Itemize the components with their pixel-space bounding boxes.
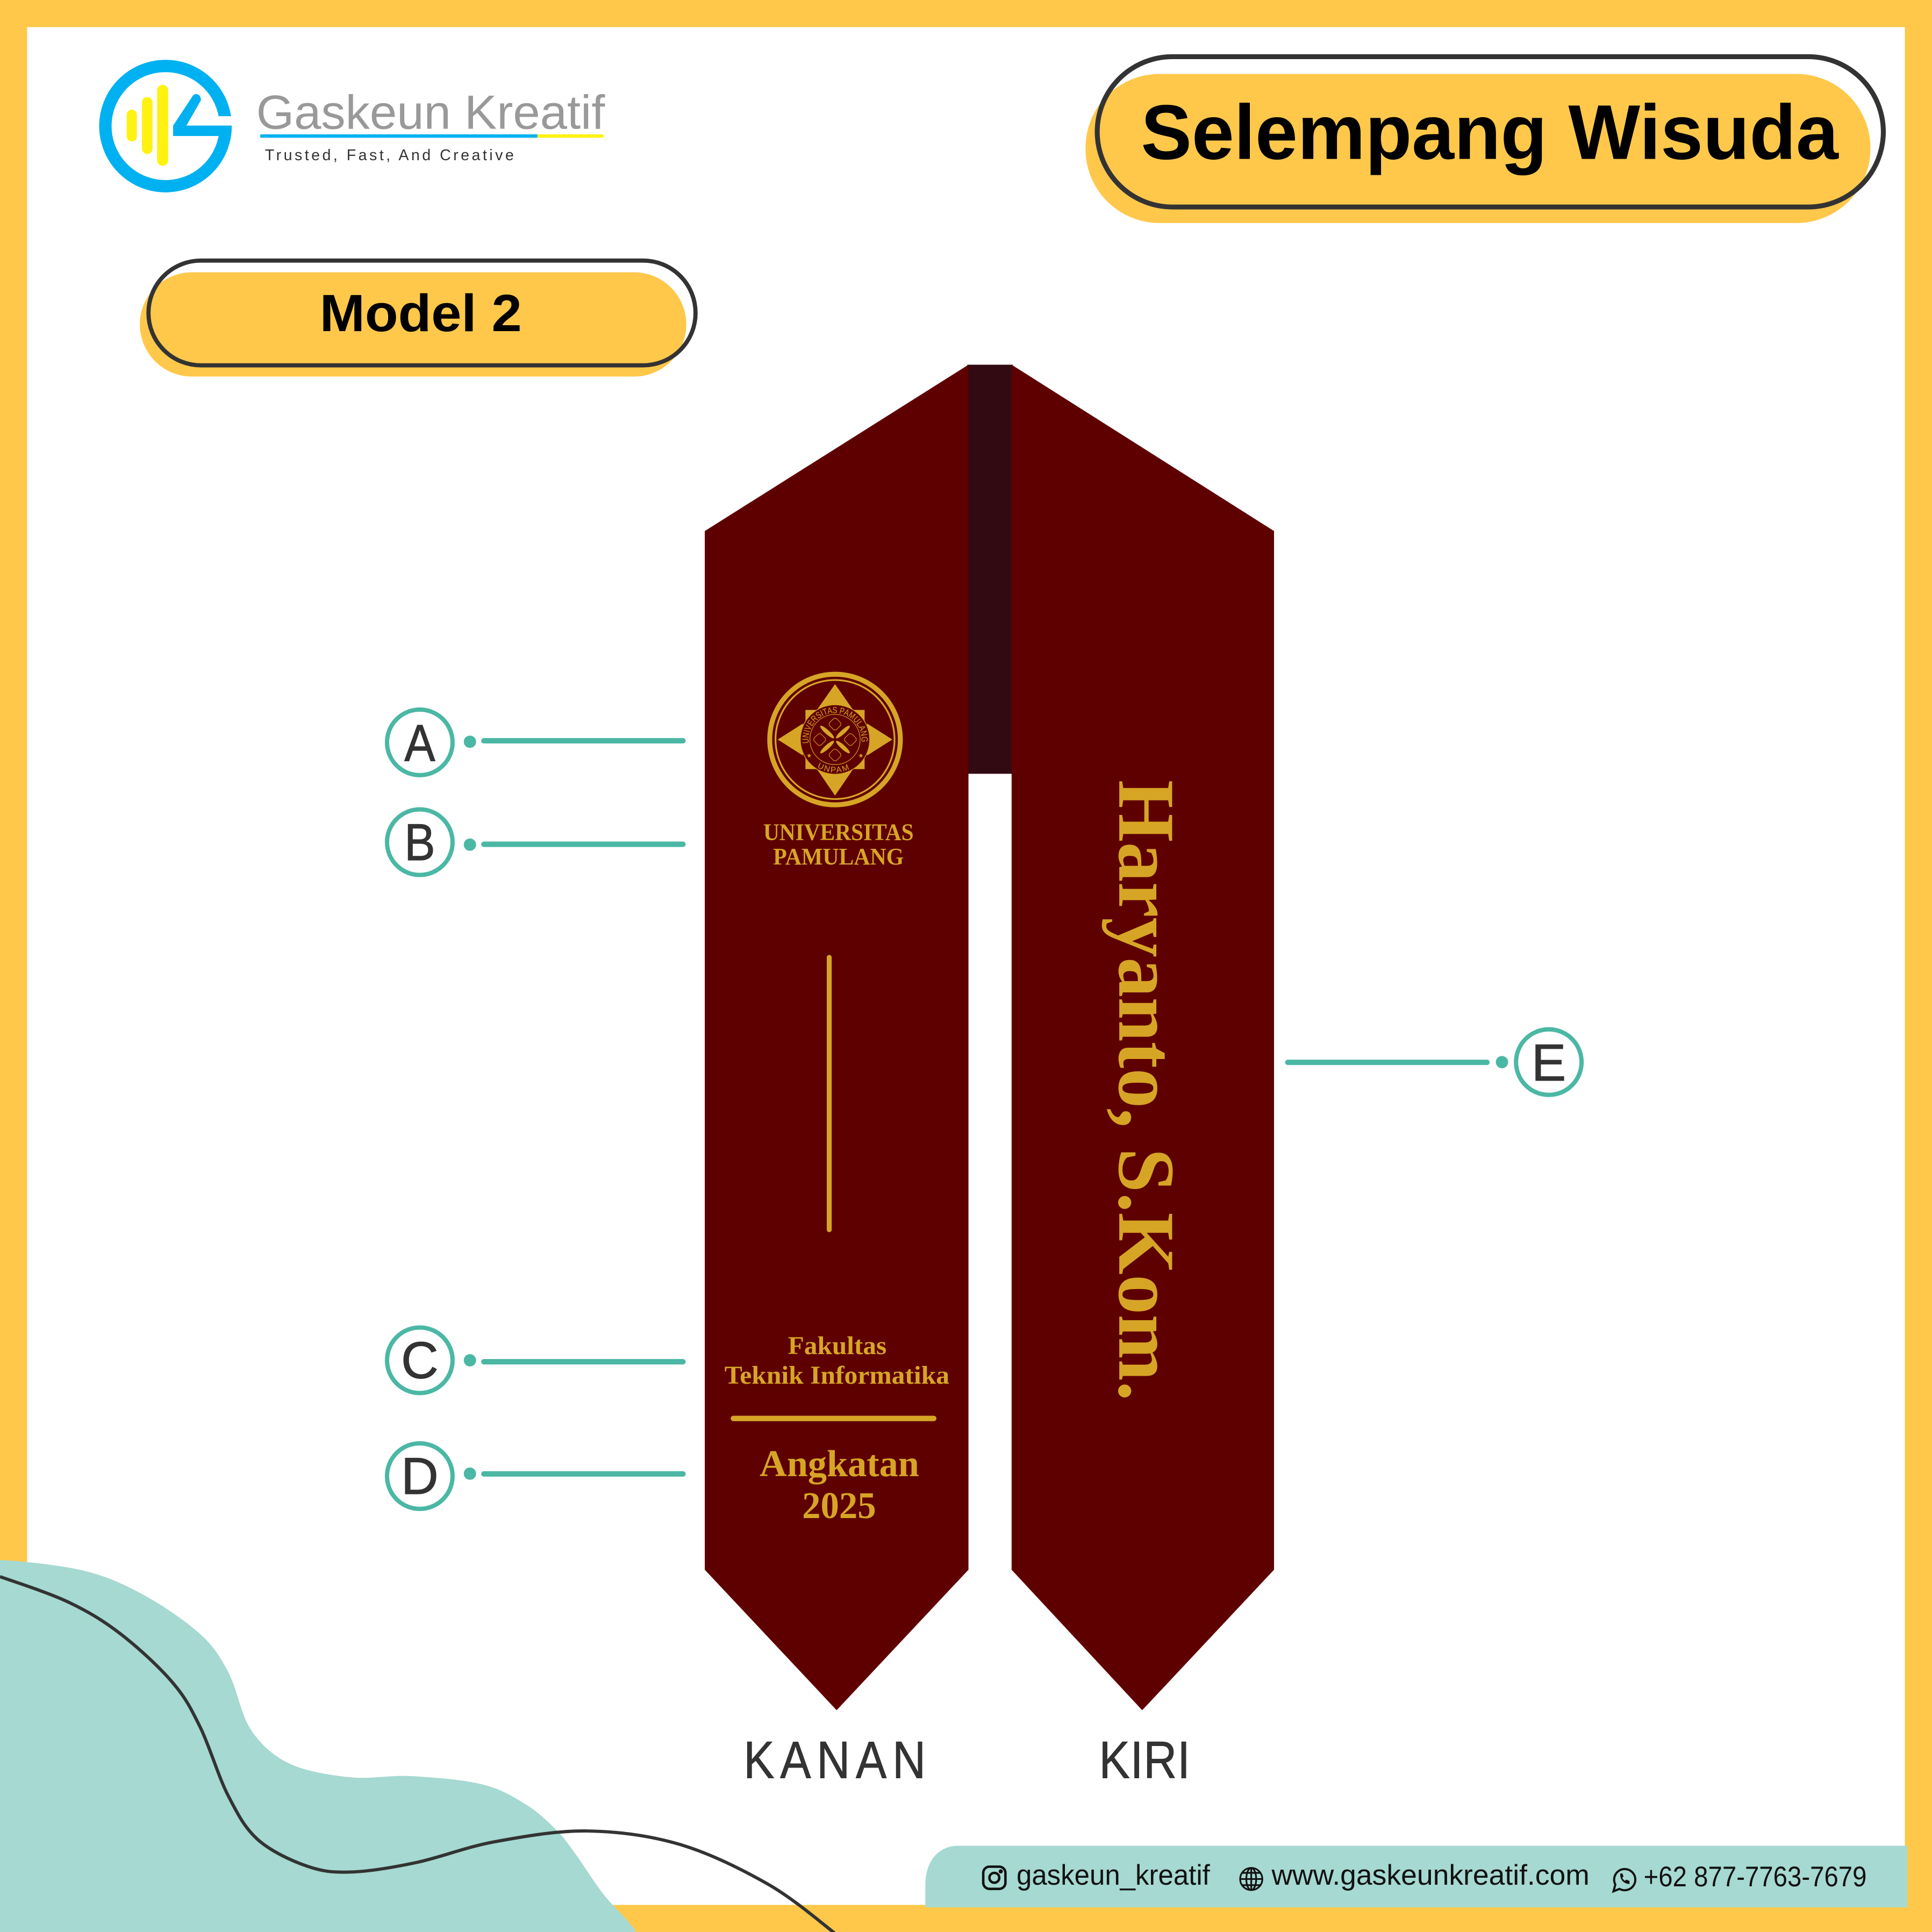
- logo underline blue: [260, 134, 539, 138]
- callout A: [387, 710, 686, 775]
- callout C: [387, 1327, 686, 1393]
- label: kanan: KANAN: [743, 1731, 926, 1790]
- text: angkatan: Angkatan: [760, 1443, 919, 1485]
- emblem: UNIVERSITAS PAMULANG: [802, 707, 868, 743]
- footer text: phone: +62 877-7763-7679: [1644, 1861, 1867, 1893]
- heading: model 2: Model 2: [320, 284, 522, 342]
- stole: kanan: [686, 364, 969, 1711]
- logo mark: bars: [127, 85, 168, 166]
- callout D: [387, 1443, 686, 1509]
- text: universitas: UNIVERSITAS: [763, 819, 914, 845]
- logo tagline: Trusted, Fast, And Creative: [265, 147, 514, 164]
- logo mark: ring: [99, 60, 232, 192]
- icon: globe: [1240, 1868, 1262, 1890]
- title: Selempang Wisuda: [1141, 89, 1839, 176]
- emblem: UNPAM: [818, 762, 849, 773]
- text: teknik informatika: Teknik Informatika: [725, 1361, 949, 1390]
- callout C: C: [401, 1332, 439, 1390]
- neck band: [967, 364, 1013, 774]
- heading: model 2: [140, 261, 696, 376]
- logo: [99, 60, 605, 192]
- callout B: [387, 810, 686, 875]
- decorative curve: [0, 1577, 838, 1932]
- emblem: ★: [858, 752, 864, 760]
- callout A: A: [404, 714, 435, 772]
- text: fakultas: Fakultas: [788, 1332, 886, 1360]
- logo wordmark: Gaskeun Kreatif: [256, 85, 605, 139]
- footer text: website: www.gaskeunkreatif.com: [1271, 1859, 1590, 1891]
- blob: bottom-left teal shape: [0, 1560, 636, 1932]
- text: pamulang: PAMULANG: [773, 843, 904, 870]
- emblem: ★: [806, 752, 812, 760]
- icon: instagram: [983, 1867, 1005, 1889]
- callout B: B: [404, 814, 435, 871]
- stole: kiri: [1012, 364, 1274, 1710]
- callout E: E: [1532, 1034, 1566, 1092]
- name: Haryanto, S.Kom.: [1101, 780, 1191, 1401]
- icon: whatsapp: [1613, 1869, 1635, 1891]
- vertical gold line: [827, 955, 832, 1232]
- horizontal gold line: [731, 1416, 936, 1421]
- footer text: instagram handle: gaskeun_kreatif: [1017, 1859, 1210, 1891]
- callout E: [1285, 1029, 1582, 1095]
- title: [1085, 56, 1883, 223]
- callout D: D: [401, 1448, 439, 1505]
- text: year: 2025: [802, 1485, 876, 1527]
- logo underline yellow: [537, 134, 604, 138]
- footer bar: [925, 1846, 1907, 1907]
- label: kiri: KIRI: [1099, 1731, 1190, 1790]
- emblem: [767, 672, 903, 807]
